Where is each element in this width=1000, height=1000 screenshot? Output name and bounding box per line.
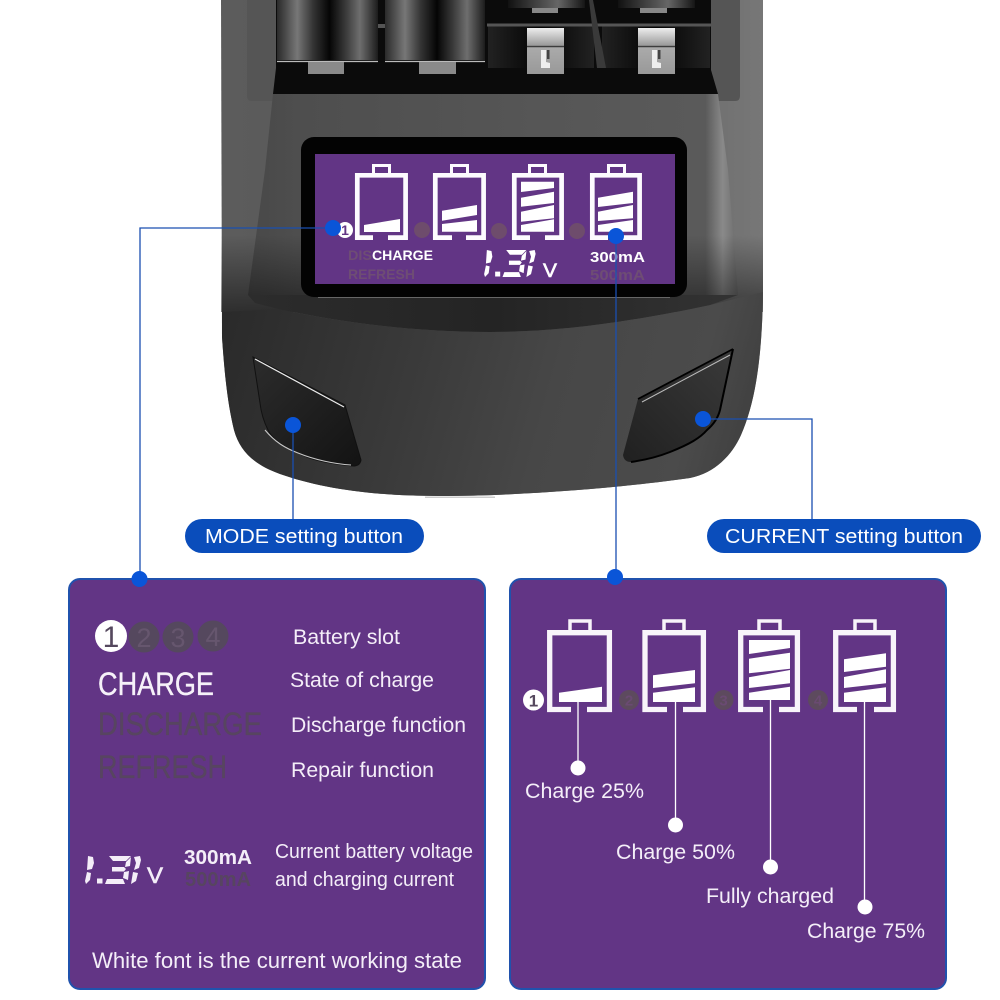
- sample: 300mA: 300mA: [184, 847, 252, 869]
- marker dot: right panel: [607, 569, 623, 585]
- LCD battery 2: [435, 166, 484, 238]
- slot number 1: [523, 690, 544, 710]
- label: Current battery voltage and charging current: Current battery voltage: [275, 841, 473, 863]
- CURRENT setting button label: CURRENT setting button: [725, 526, 963, 548]
- table reflection: [425, 496, 495, 498]
- panel: battery charge levels: [510, 579, 946, 989]
- charger body: [221, 0, 763, 496]
- LCD voltage readout: V: [543, 261, 557, 282]
- leader line: current button: [703, 419, 812, 520]
- LCD current text: 500mA: [590, 267, 645, 284]
- label: Repair function: Repair function: [291, 759, 434, 782]
- node 75%: [858, 900, 872, 914]
- LCD mode text: REFRESH: [348, 266, 415, 282]
- node 50%: [668, 818, 683, 832]
- inserted battery 2: [385, 0, 485, 60]
- MODE setting button label: MODE setting button: [205, 526, 403, 548]
- label: State of charge: State of charge: [290, 669, 434, 692]
- connector 25%: [577, 702, 579, 768]
- slot number 3: [714, 690, 734, 710]
- connector 50%: [674, 702, 676, 825]
- lower front shell: [222, 292, 763, 496]
- slot number 2: [619, 690, 639, 710]
- sample: 500mA: 500mA: [185, 869, 251, 891]
- LCD slot indicators: 1: [341, 222, 349, 238]
- label: Current battery voltage and charging current: and charging current: [275, 869, 454, 891]
- marker dot: mode button: [285, 417, 301, 433]
- LCD current text: 300mA: [590, 249, 645, 266]
- LCD slot indicators: [337, 222, 585, 239]
- left button: [253, 357, 361, 466]
- inserted battery 1: [277, 0, 378, 60]
- LCD screen: [315, 154, 675, 284]
- battery: 75%: [807, 621, 925, 943]
- leader line: slot to left panel: [140, 228, 334, 579]
- slot number 3: 3: [719, 692, 728, 710]
- right empty slots: [487, 0, 711, 68]
- label: Discharge function: Discharge function: [291, 714, 466, 737]
- LCD current text: [590, 249, 645, 284]
- middle panel: [248, 94, 738, 295]
- CURRENT setting button label: [707, 519, 981, 553]
- connector full: [770, 700, 772, 867]
- marker dot: left panel: [132, 571, 148, 587]
- slot number icons: 3: [170, 623, 186, 653]
- slot number icons: [95, 620, 228, 654]
- marker dot: current button: [695, 411, 711, 427]
- label: Current battery voltage and charging current: [275, 841, 473, 891]
- slot number icons: 1: [103, 621, 119, 654]
- label: Battery slot: Battery slot: [293, 626, 400, 649]
- metal contact 3: [527, 28, 564, 74]
- marker dot: current display: [608, 228, 624, 244]
- sample: DISCHARGE: DISCHARGE: [98, 706, 262, 742]
- battery: 25%: [525, 621, 644, 803]
- dark band below display: [248, 295, 738, 332]
- sample: CHARGE: CHARGE: [98, 666, 214, 702]
- node 25%: [570, 760, 586, 776]
- side inner panels: [247, 0, 740, 101]
- slot number icons: 2: [136, 623, 152, 653]
- charger device: [221, 0, 763, 498]
- leader line: current to right panel: [615, 236, 617, 577]
- LCD battery 3: [514, 166, 562, 238]
- metal contact 4: [638, 28, 675, 74]
- LCD bezel: [301, 137, 687, 297]
- connector 75%: [864, 702, 866, 907]
- label 25%: Charge 25%: [525, 780, 644, 803]
- slot number 1: 1: [529, 692, 538, 710]
- sample: voltage readout: V: [147, 863, 163, 888]
- LCD voltage readout: [484, 250, 557, 282]
- battery: full: [706, 621, 834, 908]
- LCD battery 1: [357, 166, 406, 238]
- node full: [763, 860, 778, 874]
- note: white font meaning: White font is the current working state: [92, 948, 462, 973]
- LCD mode text: CHARGE: [372, 247, 433, 263]
- label 75%: Charge 75%: [807, 920, 925, 943]
- sample: REFRESH: REFRESH: [98, 749, 227, 785]
- LCD battery 4: [592, 166, 640, 238]
- battery bay: [273, 0, 718, 94]
- panel: display legend: [69, 579, 485, 989]
- right button: [623, 349, 733, 462]
- MODE setting button label: [185, 519, 424, 553]
- slot number 4: 4: [814, 692, 823, 710]
- LCD mode text: DIS: [348, 247, 372, 263]
- slot number icons: 4: [205, 622, 221, 652]
- leader line: mode button: [292, 425, 294, 520]
- sample: voltage readout: [85, 856, 163, 888]
- slot number 4: [808, 690, 828, 710]
- marker dot: slot: [325, 220, 341, 236]
- LCD mode text: [348, 247, 433, 282]
- lower body shading: [221, 235, 763, 312]
- label 50%: Charge 50%: [616, 841, 735, 864]
- battery: 50%: [616, 621, 735, 864]
- label full: Fully charged: [706, 885, 834, 908]
- slot number 2: 2: [625, 692, 633, 710]
